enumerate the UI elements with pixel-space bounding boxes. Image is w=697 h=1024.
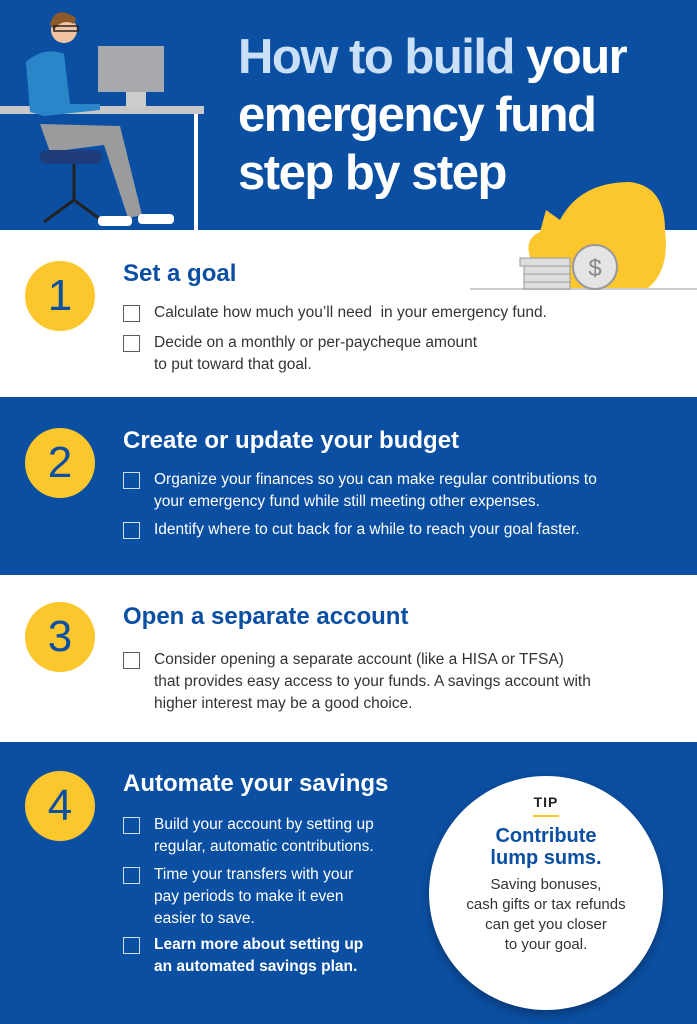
number 3: 3: [48, 612, 72, 661]
title: step by step: [238, 146, 506, 200]
step 4: Learn more about setting up: [154, 936, 363, 953]
step 3: that provides easy access to your funds. A savings account with: [154, 673, 591, 690]
tip callout: TIP: [534, 794, 558, 810]
step 1: Calculate how much you’ll need in your emergency fund.: [154, 304, 547, 321]
tip callout: to your goal.: [505, 936, 587, 953]
heading: Open a separate account: [123, 603, 408, 630]
number 4: [25, 771, 95, 841]
step 2: [0, 397, 697, 575]
step 1: to put toward that goal.: [154, 356, 312, 373]
number 3: [25, 602, 95, 672]
step 4: [0, 742, 697, 1024]
step 4: Time your transfers with your: [154, 866, 353, 883]
heading: Set a goal: [123, 260, 236, 287]
tip callout: Saving bonuses,: [491, 876, 601, 893]
step 4: an automated savings plan.: [154, 958, 357, 975]
items: [123, 651, 591, 712]
step 3: [25, 602, 591, 712]
title: How to build your: [238, 30, 626, 84]
step 2: your emergency fund while still meeting other expenses.: [154, 493, 540, 510]
number 2: 2: [48, 438, 72, 487]
step 4: regular, automatic contributions.: [154, 838, 374, 855]
tip callout: lump sums.: [490, 847, 602, 869]
step 3: higher interest may be a good choice.: [154, 695, 412, 712]
icon: piggy bank with coins: [470, 182, 697, 290]
step 4: easier to save.: [154, 910, 255, 927]
step 1: [25, 260, 547, 373]
step 4: Build your account by setting up: [154, 816, 374, 833]
items: [123, 471, 597, 539]
items: [123, 816, 374, 975]
heading: Automate your savings: [123, 770, 388, 797]
tip callout: Contribute: [495, 825, 597, 847]
step 4: pay periods to make it even: [154, 888, 344, 905]
heading: Create or update your budget: [123, 427, 459, 454]
icon: piggy bank with coins: $: [588, 255, 602, 282]
number 4: 4: [48, 781, 72, 830]
illustration: person at desk: [0, 12, 204, 230]
step 1: Decide on a monthly or per-paycheque amount: [154, 334, 477, 351]
tip callout: can get you closer: [485, 916, 607, 933]
header panel: [0, 0, 697, 230]
step 2: Organize your finances so you can make regular contributions to: [154, 471, 597, 488]
items: [123, 304, 547, 373]
step 2: Identify where to cut back for a while to reach your goal faster.: [154, 521, 580, 538]
title: emergency fund: [238, 88, 595, 142]
number 2: [25, 428, 95, 498]
step 3: Consider opening a separate account (like a HISA or TFSA): [154, 651, 564, 668]
tip callout: [429, 776, 663, 1010]
title: [238, 30, 627, 200]
number 1: [25, 261, 95, 331]
tip callout: cash gifts or tax refunds: [466, 896, 626, 913]
number 1: 1: [48, 271, 72, 320]
